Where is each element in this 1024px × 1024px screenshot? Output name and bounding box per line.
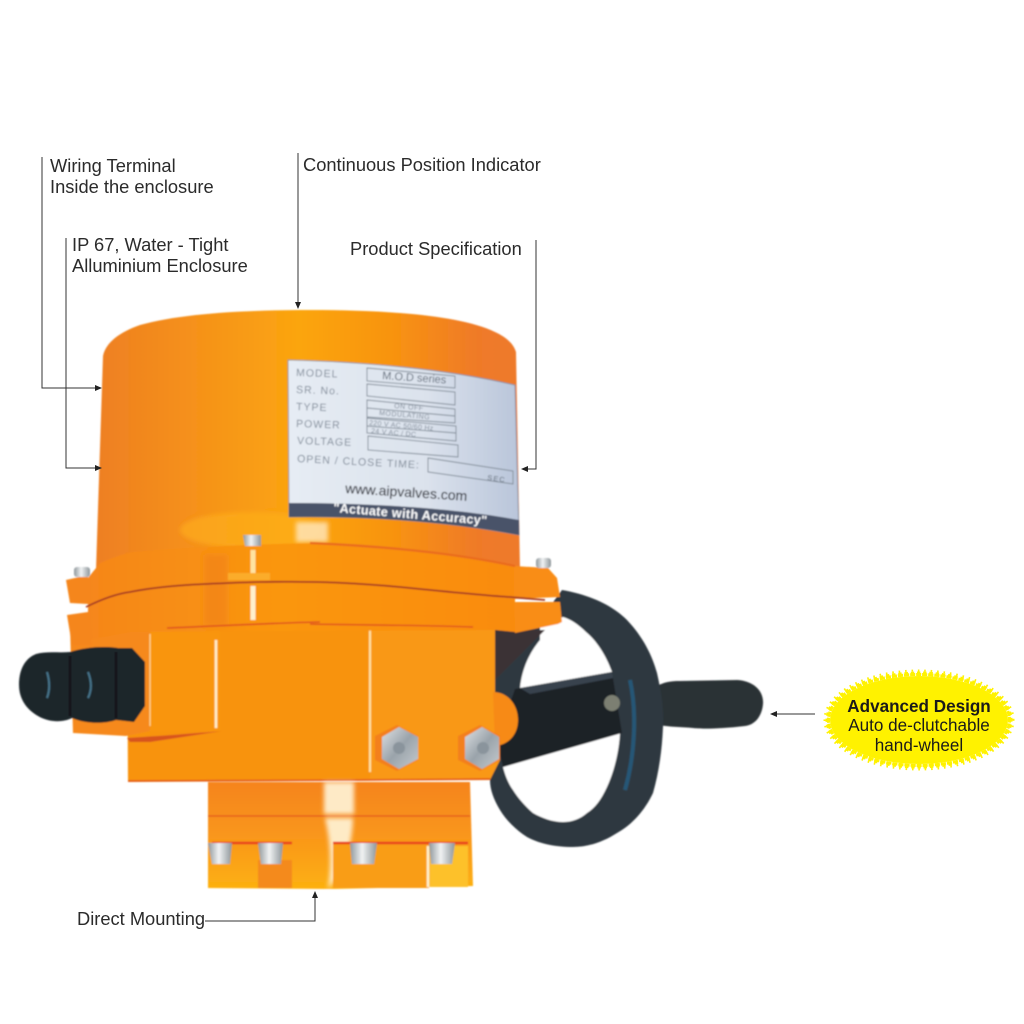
gland outer body [19,647,145,723]
bottom flange right block [333,844,429,888]
flange right tab upper [514,566,560,599]
plate field labels: TYPE [296,401,328,414]
arrow: position indicator [297,153,299,304]
bottom flange right notch edge [333,842,468,844]
flange shaded band [205,555,227,625]
bottom flange left notch edge [212,842,292,844]
orange shaft boss [493,692,518,746]
plate field labels: M.O.D series [382,370,447,387]
mounting stud 2 [258,843,283,864]
hand-wheel handle grip [655,680,763,729]
arrowheads [95,302,777,898]
flange lower edge left [167,622,320,628]
starburst text: Auto de-clutchable [848,716,990,735]
flange cylinder joint shade [310,543,515,566]
starburst heading: Advanced Design [847,697,991,716]
plate field labels: OPEN / CLOSE TIME: [297,453,420,471]
top flange [88,543,515,640]
actuator photo illustration [19,310,763,889]
label: continuous position indicator: Continuous Position Indicator [303,154,541,175]
plate field labels: VOLTAGE [297,435,352,449]
hex nut [465,727,499,769]
plate field labels: 220 V AC 50/60 Hz [369,420,434,433]
plate website: www.aipvalves.com [344,480,468,504]
bottom flange white stripe [427,846,429,887]
body vertical highlight [369,628,371,772]
hex nut [382,727,418,769]
label: IP 67 enclosure: IP 67, Water - Tight [72,234,228,255]
terminal block right highlight [215,640,217,728]
neck groove line [208,815,470,817]
terminal block highlights [149,634,151,726]
left cable-entry shelf [70,625,155,736]
label: direct mounting: Direct Mounting [77,908,205,929]
cylinder lower highlight [180,512,320,548]
arrow: hand-wheel [775,713,815,715]
callout: advanced design starburst [824,670,1014,770]
arrow: IP 67 enclosure [66,238,96,468]
flange small plate [228,573,270,580]
hex bolt right [458,725,500,771]
nameplate [288,360,519,535]
terminal block boss [150,631,220,731]
gland ridge shadow [70,652,116,718]
flange left tab lower [67,612,92,645]
hand-wheel spoke arm [497,672,622,767]
main cylinder enclosure [96,310,520,570]
starburst shape [824,670,1014,770]
plate field labels: SEC [487,473,506,485]
mounting neck [208,782,473,889]
plate field labels: ON OFF [394,403,424,413]
gland highlights [47,672,91,698]
mounting stud 1 [208,843,232,864]
hand-wheel rim silhouette [490,590,663,847]
hex washer [458,725,500,771]
plate field labels: 24 V AC / DC [371,428,416,439]
flange highlight upper [250,550,256,574]
label: product specification: Product Specification [350,238,522,259]
starburst text: hand-wheel [875,736,963,755]
plate field labels: POWER [296,418,341,432]
label: wiring terminal: Wiring Terminal [50,155,176,176]
hand-wheel lower opening [503,733,620,822]
plate form boxes [367,368,513,484]
plate background [288,360,519,535]
callout lines and arrows [42,153,815,921]
bottom flange left shaded block [258,860,292,888]
nut centre [393,742,405,754]
neck highlight [324,782,354,889]
flange bolt top [243,535,261,546]
hand-wheel hub screw [604,695,620,711]
mounting stud 3 [350,843,377,864]
cable gland [19,647,145,723]
plate field labels: SR. No. [296,384,340,398]
label: IP 67 enclosure: Alluminium Enclosure [72,255,248,276]
hand-wheel [490,590,763,847]
plate field labels [296,367,506,485]
mounting stud 4 [429,843,455,864]
dark shadow under right tab [495,630,545,680]
bottom flange bright block [430,846,468,887]
cylinder white highlight [296,522,328,542]
hand-wheel rim highlight [625,680,634,790]
plate field labels: MODEL [296,367,339,380]
flange seam [86,582,545,607]
hand-wheel upper opening [520,617,612,688]
plate dark band [289,503,519,535]
flange highlight lower [250,586,256,620]
flange lower edge right [310,624,473,627]
arrow: wiring terminal [42,157,96,388]
arrow: direct mounting [205,896,315,921]
flange right tab lower [514,602,562,633]
right body face [370,628,500,780]
flange bolt right [536,558,551,568]
arrow: product specification [526,240,536,469]
flange bolt left [74,567,90,577]
hex washer [375,725,418,771]
flange left tab upper [66,575,88,604]
hand-wheel spoke highlight [520,672,613,694]
body shadow under boss [127,731,222,742]
label: wiring terminal: Inside the enclosure [50,176,214,197]
nut centre [477,742,489,754]
hex bolt left [375,725,418,771]
plate field labels: MODULATING [379,410,430,421]
plate slogan: "Actuate with Accuracy" [333,501,488,528]
lower gearbox body [127,625,500,782]
body bottom edge [128,779,490,781]
